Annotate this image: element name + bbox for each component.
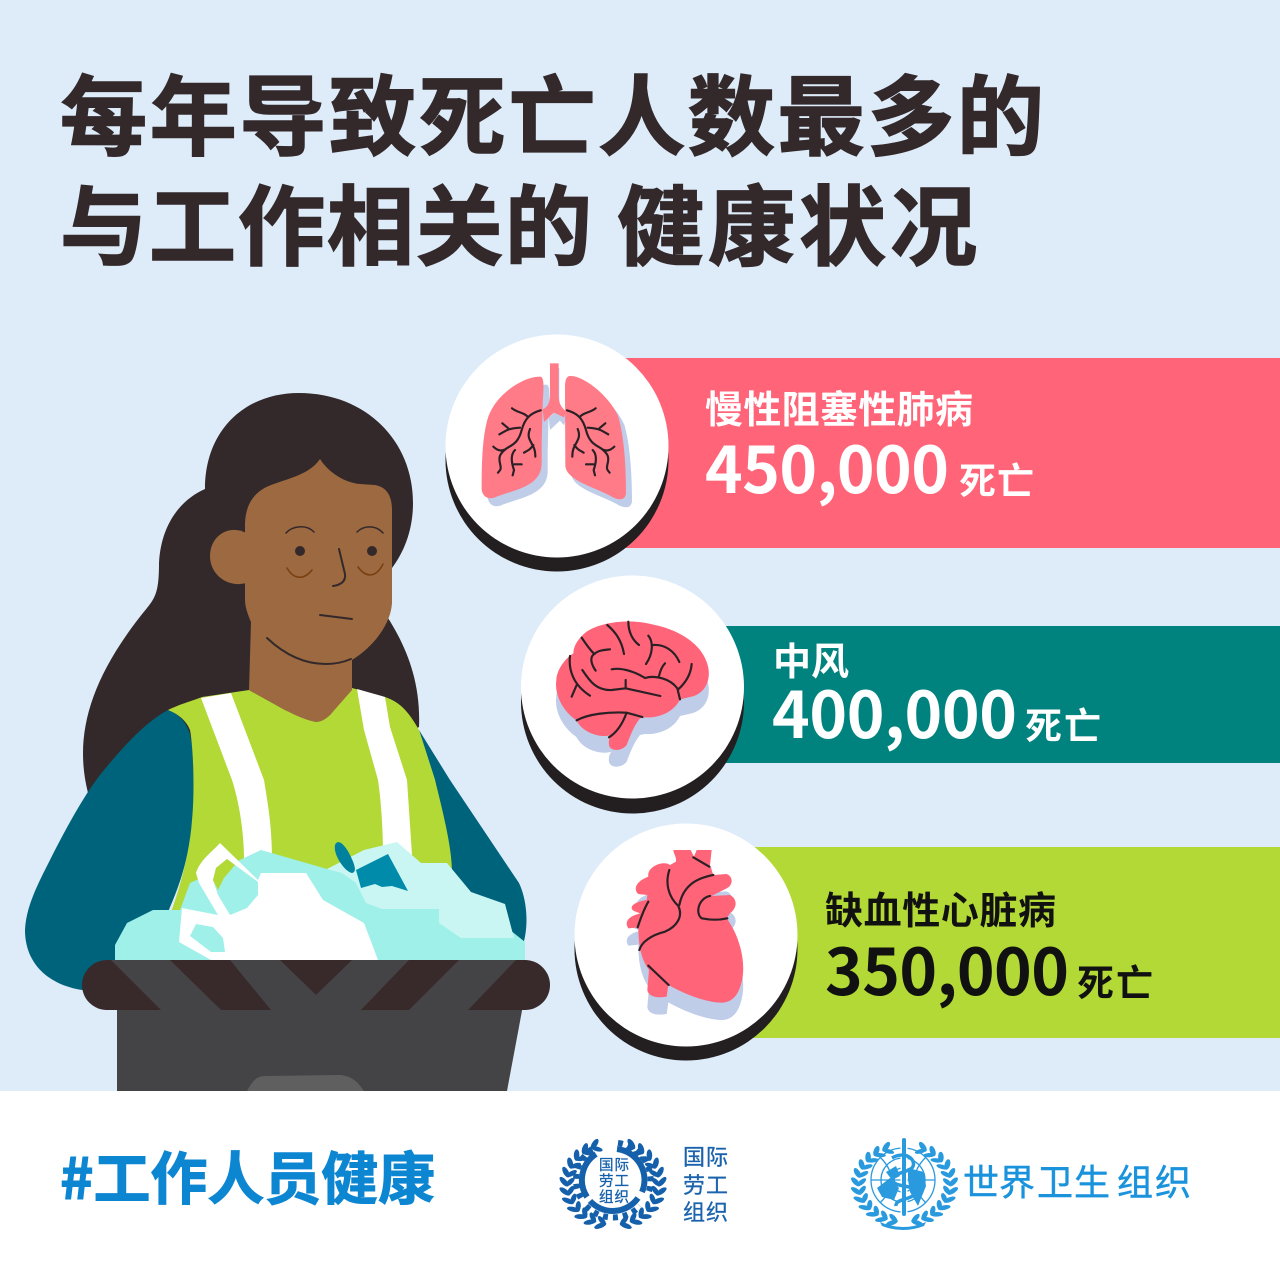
footer band <box>0 1091 1280 1280</box>
red bar <box>610 358 1280 548</box>
number: heart disease deaths: 350,000 <box>825 922 1069 1014</box>
logo text: WHO <box>963 1162 1191 1203</box>
wreath <box>557 1137 669 1233</box>
panel: COPD <box>446 334 1280 572</box>
arm: left sleeve <box>25 710 194 990</box>
continents <box>877 1166 926 1206</box>
number: heart disease deaths: 死亡 <box>1077 953 1153 1007</box>
circle shadow <box>574 838 798 1060</box>
circle shadow <box>521 590 744 814</box>
title: 健康状况 <box>617 158 977 284</box>
panel: stroke <box>521 576 1280 814</box>
circle <box>574 824 798 1046</box>
waste: aqua plastic <box>115 850 525 960</box>
wreath <box>849 1140 960 1230</box>
waste: pale plastic <box>327 842 514 938</box>
circle <box>521 576 744 798</box>
logo text: WHO: 世界 <box>963 1162 1035 1203</box>
waste bin body <box>117 1000 524 1091</box>
title <box>60 48 1044 284</box>
title: 每年导致死亡人数最多的 <box>60 48 1044 174</box>
logo text: WHO: 组织 <box>1117 1162 1191 1203</box>
gear <box>576 1143 651 1217</box>
panel: ischaemic heart disease <box>574 824 1280 1060</box>
icon: heart <box>627 850 743 1020</box>
hair <box>83 393 419 800</box>
number: COPD deaths: 死亡 <box>959 451 1034 505</box>
icon: lungs <box>482 363 632 507</box>
icon: brain <box>556 622 709 767</box>
logo text: WHO: 卫生 <box>1037 1162 1110 1203</box>
logo: WHO <box>849 1140 960 1230</box>
number: COPD deaths: 450,000 <box>705 420 949 512</box>
bin rim <box>82 960 550 1010</box>
hashtag: #工作人员健康 <box>60 1134 435 1216</box>
illustration: sanitation worker with waste bin <box>25 393 550 1091</box>
label: stroke: 中风 <box>773 631 849 686</box>
circle shadow <box>446 348 668 572</box>
globe <box>871 1148 935 1212</box>
green bar <box>740 847 1280 1038</box>
number: stroke deaths: 400,000 <box>772 665 1017 757</box>
icon: blue bottle <box>335 842 408 891</box>
logo text: ILO <box>683 1145 728 1225</box>
vest strap right <box>357 689 412 855</box>
label: ischaemic heart disease: 缺血性心脏病 <box>825 880 1056 935</box>
logo inner text: 劳工 <box>599 1173 629 1190</box>
logo inner text: 国际 <box>599 1157 629 1174</box>
circle <box>446 334 668 558</box>
staff and serpent <box>892 1140 915 1214</box>
logo inner text <box>599 1157 629 1206</box>
logo text: ILO: 组织 <box>683 1200 728 1225</box>
logo: ILO <box>557 1137 669 1233</box>
logo text: ILO: 劳工 <box>683 1173 728 1198</box>
teal bar <box>700 626 1280 763</box>
ear <box>210 530 246 584</box>
vest strap left <box>201 693 272 860</box>
bin handle <box>247 1075 364 1091</box>
logo text: ILO: 国际 <box>683 1145 728 1170</box>
logo inner text: 组织 <box>599 1189 629 1206</box>
arm: right sleeve <box>419 730 526 945</box>
number: stroke deaths: 死亡 <box>1025 696 1101 750</box>
title: 与工作相关的 <box>60 158 592 284</box>
neck and head <box>245 459 392 722</box>
face details <box>267 527 383 664</box>
bag cut-out <box>190 924 225 952</box>
bag handle opening <box>213 859 258 915</box>
high-visibility vest <box>168 688 452 920</box>
waste: white bag with handle <box>179 843 378 960</box>
label: COPD: 慢性阻塞性肺病 <box>705 379 973 434</box>
